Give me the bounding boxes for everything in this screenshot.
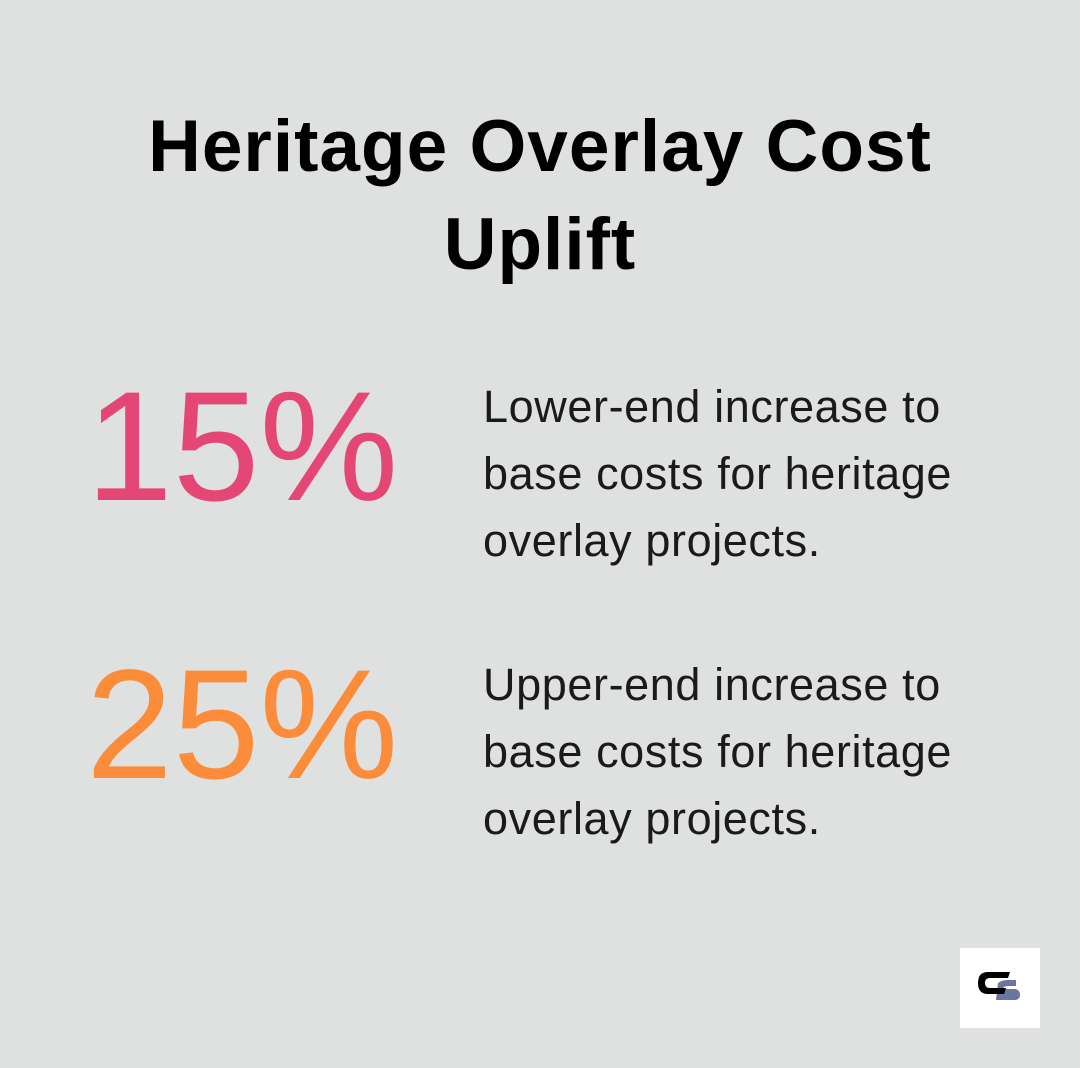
title: Heritage Overlay Cost	[148, 106, 932, 187]
text: upper-end description: overlay projects.	[483, 793, 821, 844]
text: upper-end description	[483, 659, 952, 844]
logo	[960, 948, 1040, 1028]
text: lower-end description	[483, 381, 952, 566]
title: Uplift	[444, 204, 636, 285]
text: lower-end description: overlay projects.	[483, 515, 821, 566]
text: upper-end description: Upper-end increase to	[483, 659, 941, 710]
text: upper-end description: base costs for heritage	[483, 726, 952, 777]
text: lower-end description: base costs for heritage	[483, 448, 952, 499]
stat: 25%: 25%	[86, 638, 398, 812]
text: lower-end description: Lower-end increase to	[483, 381, 941, 432]
title	[148, 106, 932, 285]
stat: 15%: 15%	[86, 360, 398, 534]
